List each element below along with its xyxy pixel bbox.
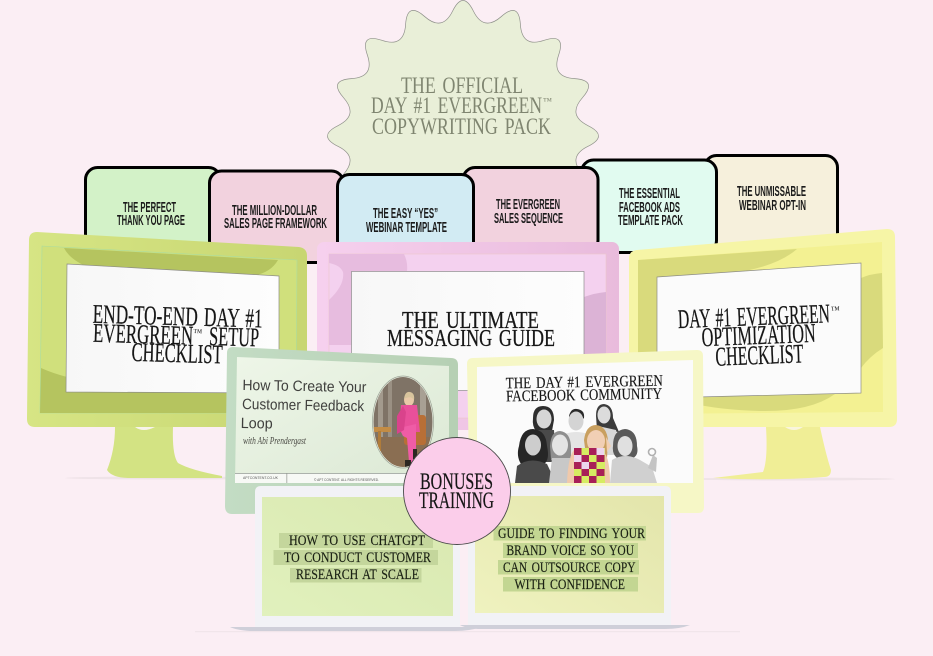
card: sales sequence (463, 168, 598, 252)
person back right (596, 404, 619, 455)
highlighted text (494, 526, 646, 593)
heading: END-TO-END DAY #1 (92, 299, 263, 334)
laptop: left, chatgpt research (230, 486, 481, 631)
shadow (685, 478, 895, 480)
card: webinar opt-in: WEBINAR OPT-IN (739, 198, 806, 214)
heading: OPTIMIZATION (701, 318, 816, 352)
shadow (65, 476, 275, 480)
screen (657, 263, 861, 398)
card: sales page framework: SALES PAGE FRAMEWORK (224, 216, 327, 232)
screen (66, 264, 279, 393)
bonus slide: facebook community (467, 350, 704, 513)
badge: bonuses training (404, 438, 510, 544)
heading (91, 299, 263, 371)
presenter name: with Abi Prendergast (243, 436, 306, 447)
card: thank you page: THANK YOU PAGE (117, 213, 185, 229)
footer strip (235, 473, 449, 483)
frame (317, 242, 619, 430)
ground shadow (195, 631, 740, 632)
stand (713, 427, 831, 479)
card: sales sequence: SALES SEQUENCE (494, 211, 563, 227)
heading: MESSAGING GUIDE (387, 326, 555, 352)
heading: Customer Feedback (242, 396, 365, 415)
card: webinar template: THE EASY “YES” (373, 206, 438, 222)
tabbed template cards (86, 156, 838, 268)
card: webinar opt-in (704, 156, 838, 256)
heading: ™ (193, 328, 203, 339)
heading: SETUP (209, 321, 260, 352)
card: sales sequence: THE EVERGREEN (496, 197, 560, 213)
heading (387, 308, 555, 352)
heading: How To Create Your (242, 377, 367, 396)
heading: Loop (241, 415, 273, 433)
title text: DAY #1 EVERGREEN (371, 93, 542, 118)
stand (107, 427, 222, 478)
bonus slide: customer feedback loop (225, 347, 458, 514)
card: webinar template: WEBINAR TEMPLATE (366, 220, 447, 236)
lid (468, 486, 671, 625)
badge: bonuses training: TRAINING (419, 488, 494, 513)
monitor: messaging guide (317, 242, 619, 430)
heading (677, 298, 842, 373)
monitor: optimization checklist (629, 229, 897, 480)
heading: EVERGREEN (93, 318, 194, 351)
person front centre (549, 431, 572, 483)
heading: FACEBOOK COMMUNITY (506, 386, 663, 405)
card: thank you page: THE PERFECT (123, 200, 176, 216)
title text (371, 73, 552, 139)
laptop: right, brand voice guide (460, 486, 690, 629)
heading: THE ULTIMATE (402, 308, 539, 334)
heading: DAY #1 EVERGREEN (677, 298, 830, 334)
highlighted text: GUIDE TO FINDING YOUR (498, 526, 645, 542)
person back centre (566, 408, 586, 455)
heading: CHECKLIST (131, 337, 223, 369)
slide frame (467, 350, 704, 513)
card: facebook ads: FACEBOOK ADS (619, 200, 680, 216)
base (230, 627, 481, 631)
highlighted text: CAN OUTSOURCE COPY (503, 560, 636, 576)
heading: ™ (831, 305, 840, 316)
title text: COPYWRITING PACK (372, 114, 551, 139)
slide surface (477, 360, 693, 483)
card: webinar template (338, 174, 474, 262)
slide frame (225, 347, 458, 514)
lid (255, 486, 460, 627)
title text: ™ (543, 96, 552, 106)
badge: bonuses training: BONUSES (420, 469, 493, 494)
scalloped title badge (328, 0, 598, 174)
heading (241, 377, 367, 434)
heading: CHECKLIST (715, 338, 804, 372)
person back left (533, 406, 556, 462)
card: sales page framework (210, 171, 344, 262)
screen (262, 497, 453, 616)
heading (506, 373, 664, 405)
bonus slide: customer feedback loop: APTCONTENT.CO.UK (243, 476, 279, 480)
photo: presenter in pink suit (370, 375, 436, 471)
card: facebook ads: THE ESSENTIAL (619, 186, 680, 202)
card: facebook ads: TEMPLATE PACK (618, 213, 683, 229)
bonus slide: customer feedback loop: © APT CONTENT. ALL RIGHTS RESERVED. (314, 478, 379, 482)
base (460, 625, 690, 629)
highlighted text: RESEARCH AT SCALE (296, 567, 419, 583)
highlighted text: WITH CONFIDENCE (514, 577, 625, 593)
monitor: setup checklist (27, 232, 307, 480)
frame (27, 232, 307, 427)
screen (475, 496, 664, 613)
card: webinar opt-in: THE UNMISSABLE (737, 184, 806, 200)
card: thank you page (86, 168, 220, 268)
frame (629, 229, 897, 427)
centre person in colour (567, 425, 611, 483)
highlighted text: HOW TO USE CHATGPT (289, 533, 425, 549)
screen (352, 272, 584, 390)
highlighted text (274, 533, 438, 583)
person right with ok gesture (610, 429, 657, 483)
community group photo (515, 404, 657, 483)
title text: THE OFFICIAL (401, 73, 523, 98)
highlighted text: TO CONDUCT CUSTOMER (284, 550, 431, 566)
card: facebook ads (582, 160, 716, 252)
card: sales page framework: THE MILLION-DOLLAR (232, 203, 317, 219)
slide surface (235, 357, 449, 483)
highlighted text: BRAND VOICE SO YOU (506, 543, 634, 559)
heading: THE DAY #1 EVERGREEN (506, 373, 663, 392)
person front left (515, 429, 550, 483)
